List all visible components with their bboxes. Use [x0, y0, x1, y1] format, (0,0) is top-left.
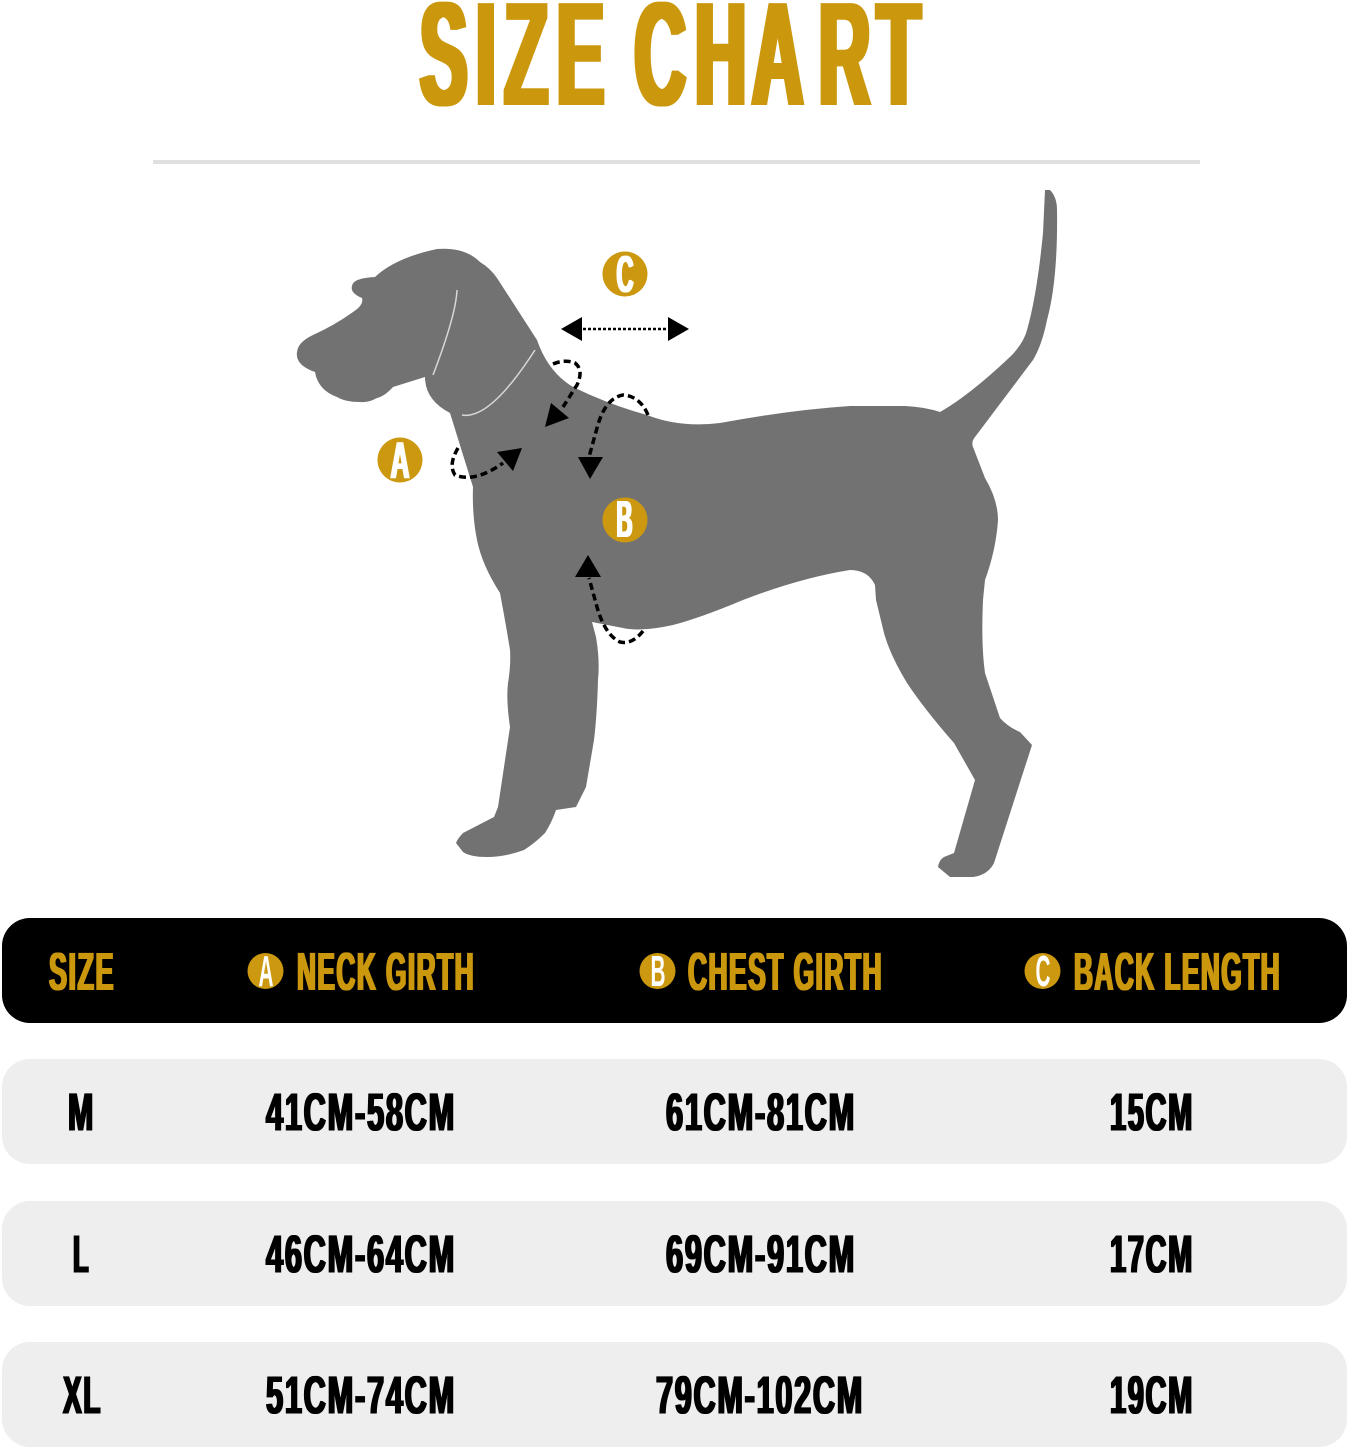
arrow: chest top: [578, 395, 648, 479]
row: M: M: [68, 1082, 95, 1142]
header: neck girth: A: [258, 947, 274, 996]
header: chest girth: B: [650, 947, 666, 996]
row: M: 41CM-58CM: [266, 1082, 456, 1142]
table header: [2, 918, 1347, 1023]
ear and collar lines: [433, 290, 535, 415]
badge A: [378, 432, 422, 490]
arrow: back length: [561, 317, 689, 341]
row: XL: [2, 1342, 1347, 1447]
row: L: 69CM-91CM: [666, 1224, 856, 1284]
row: M: [2, 1059, 1347, 1164]
dog diagram: [297, 190, 1057, 877]
arrow: neck bottom: [452, 448, 522, 477]
table header: CHEST GIRTH: [688, 942, 883, 1002]
badge B: [602, 491, 648, 549]
arrow: neck top: [545, 361, 580, 427]
dog silhouette: [297, 190, 1057, 877]
row: L: [2, 1201, 1347, 1306]
row: L: 46CM-64CM: [266, 1224, 456, 1284]
badge C: C: [616, 246, 634, 304]
row: L: L: [73, 1224, 90, 1284]
header: neck girth: [248, 942, 475, 1002]
badge B: B: [616, 491, 632, 549]
row: XL: 19CM: [1110, 1366, 1194, 1426]
row: XL: 51CM-74CM: [266, 1366, 456, 1426]
header: back length: [1024, 942, 1281, 1002]
row: XL: 79CM-102CM: [656, 1366, 864, 1426]
row: L: 17CM: [1110, 1224, 1194, 1284]
badge A: A: [390, 432, 410, 490]
arrow: chest bottom: [575, 555, 643, 643]
row: M: 15CM: [1110, 1082, 1194, 1142]
table header: SIZE: [49, 942, 115, 1002]
header: chest girth: [640, 942, 883, 1002]
header: back length: C: [1036, 947, 1050, 996]
table header: NECK GIRTH: [297, 942, 475, 1002]
row: XL: XL: [63, 1366, 102, 1426]
badge C: [602, 246, 648, 304]
row: M: 61CM-81CM: [666, 1082, 856, 1142]
